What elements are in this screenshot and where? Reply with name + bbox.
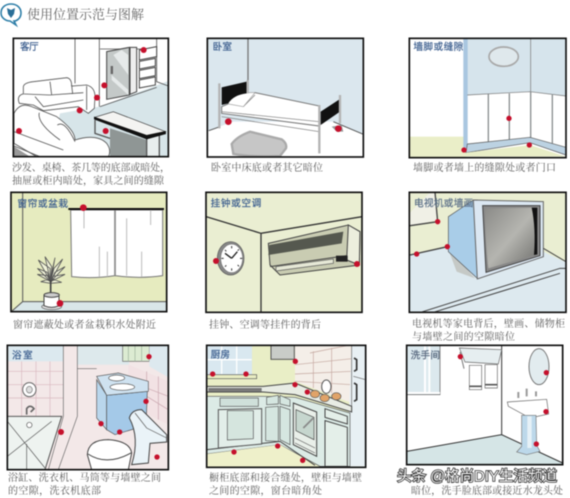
panel: washroom: 洗手间 [411, 350, 440, 362]
panel: clock and air conditioner [206, 192, 362, 312]
caption: television [412, 317, 565, 343]
caption: clock: 挂钟、空调等挂件的背后 [209, 318, 321, 331]
panel: bedroom: 卧室 [213, 41, 232, 53]
caption: bathroom: 浴缸、洗衣机、马筒等与墙壁之间 [8, 471, 161, 484]
header icon: speech bubble [1, 4, 21, 25]
caption: washroom: 暗位，洗手脸底部或接近水龙头处 [411, 484, 563, 497]
caption: living room: 沙发、桌椅、茶几等的底部或暗处， [12, 161, 170, 174]
caption: living room: 抽屉或柜内暗处，家具之间的缝隙 [12, 174, 165, 187]
panel: curtain and plant: 窗帘或盆栽 [17, 198, 68, 210]
caption: kitchen: 之间的空隙，窗台暗角处 [209, 484, 322, 497]
panel: skirting and gaps: 墙脚或缝隙 [413, 41, 464, 53]
panel: television and wall art: 电视机或墙画 [414, 198, 473, 210]
panel: kitchen: 厨房 [211, 349, 230, 361]
caption: curtain: 窗帘遮蔽处或者盆栽积水处附近 [13, 318, 156, 331]
panel: kitchen [207, 345, 366, 467]
panel: clock and air conditioner: 挂钟或空调 [211, 198, 261, 210]
panel: washroom [407, 345, 563, 465]
title: 使用位置示范与图解 [27, 7, 144, 22]
sofa [18, 78, 95, 113]
caption: living room [12, 161, 170, 187]
caption: skirting: 墙脚或者墙上的缝隙处或者门口 [413, 161, 556, 174]
caption: kitchen: 橱柜底部和接合缝处，壁柜与墙壁 [209, 471, 362, 484]
caption: bathroom: 的空隙，洗衣机底部 [8, 484, 101, 497]
panel: skirting and gaps [409, 38, 566, 158]
panel: bathroom: 浴室 [12, 350, 33, 362]
caption: bedroom: 卧室中床底或者其它暗位 [211, 161, 323, 174]
caption: television: 与墙壁之间的空隙暗位 [412, 330, 515, 343]
panel: living room: 客厅 [20, 41, 39, 53]
panel: bathroom [7, 345, 168, 470]
panel: television and wall art [409, 192, 566, 312]
caption: television: 电视机等家电背后，壁画、储物柜 [412, 317, 565, 330]
coffee table [110, 128, 147, 157]
caption: bathroom [8, 471, 161, 497]
watermark: 头条 @格尚DIY生活频道 [397, 468, 557, 485]
panel: living room [13, 38, 168, 157]
armchair [14, 105, 110, 157]
caption: kitchen [209, 471, 362, 497]
panel: bedroom [207, 38, 363, 157]
panel: curtain and plant [11, 192, 167, 312]
